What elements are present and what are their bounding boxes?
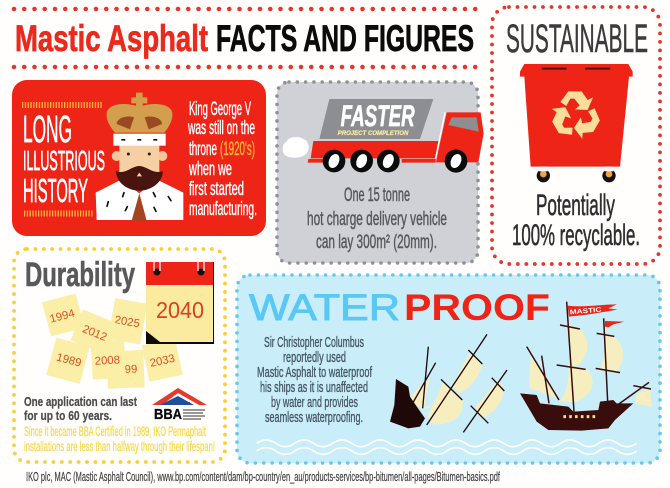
text: columbus — [257, 334, 372, 426]
year notes: 1989 — [55, 352, 83, 370]
panel: faster project completion — [277, 82, 484, 263]
text: king george v: manufacturing. — [189, 199, 257, 220]
icon: delivery truck — [283, 99, 484, 173]
year notes: 1994 — [49, 308, 76, 326]
text: columbus: his ships as it is unaffected — [260, 379, 368, 396]
text: BBA certified note: installations are less than halfway through their lifespan! — [24, 438, 215, 454]
heading: water: WATER — [249, 287, 400, 328]
text: BBA certified note: Since it became BBA Certified in 1989, IKO Permaphalt — [24, 423, 206, 439]
text: king george v: King George V — [189, 99, 251, 120]
icon: intact ship with mastic flag — [520, 302, 652, 431]
text: king george v: when we — [188, 159, 232, 180]
text: columbus: seamless waterproofing. — [265, 409, 363, 426]
heading: long illustrious history: HISTORY — [23, 172, 88, 209]
year notes: 1999 — [112, 364, 138, 376]
panel: long illustrious history: ILLUSTRIOUS — [23, 145, 105, 176]
flag label: mastic: MASTIC — [570, 307, 602, 316]
decorative hatch: bottom — [24, 210, 94, 216]
year notes: 2025 — [114, 314, 141, 330]
logo: BBA: BBA — [154, 406, 182, 423]
text: columbus: Sir Christopher Columbus — [264, 334, 364, 351]
text: columbus: by water and provides — [271, 394, 358, 411]
icon: calendar 2040 — [146, 261, 214, 344]
icon: sinking ship — [390, 334, 507, 432]
year notes: 2033 — [149, 353, 176, 370]
logo: BBA — [152, 388, 207, 423]
text: delivery vehicle fact — [307, 185, 447, 253]
icon: recycling arrows — [547, 91, 604, 142]
heading: long illustrious history: LONG — [23, 109, 72, 151]
text: potentially 100% recyclable — [512, 189, 640, 252]
year notes — [42, 293, 183, 389]
title: Mastic Asphalt: Mastic Asphalt — [15, 18, 208, 59]
text: king george v — [187, 99, 257, 220]
text: delivery vehicle fact: One 15 tonne — [344, 185, 410, 206]
header: title with dotted rules — [14, 9, 478, 67]
decorative hatch: top — [22, 102, 103, 108]
label: project completion: PROJECT COMPLETION — [338, 130, 408, 137]
text: columbus: Mastic Asphalt to waterproof — [257, 364, 372, 381]
waves — [257, 440, 637, 454]
icon: calendar 2040: 2040 — [156, 297, 204, 323]
label: faster: FASTER — [341, 100, 415, 133]
text: delivery vehicle fact: hot charge delivery vehicle — [307, 209, 447, 230]
heading: proof: PROOF — [404, 287, 550, 328]
year notes: 2008 — [94, 354, 120, 368]
panel: waterproof — [237, 275, 660, 463]
icon: recycling bin — [520, 64, 633, 182]
text: one application can last: for up to 60 years. — [24, 408, 112, 423]
panel: long illustrious history — [12, 80, 266, 236]
text: king george v: first started — [189, 179, 244, 200]
text: king george v: (1920's) — [220, 139, 255, 160]
heading: long illustrious history — [23, 109, 105, 209]
text: BBA certified note — [24, 423, 215, 454]
panel: durability — [14, 249, 225, 462]
text: delivery vehicle fact: can lay 300m² (20mm). — [316, 232, 437, 253]
heading: durability: Durability — [25, 256, 135, 294]
text: king george v: throne — [189, 139, 217, 160]
text: one application can last: One application can last — [24, 394, 138, 409]
year notes: 2012 — [81, 323, 108, 344]
panel: sustainable — [492, 7, 660, 264]
title: Facts and Figures: FACTS AND FIGURES — [216, 18, 474, 59]
icon: king with crown and beard — [96, 93, 183, 221]
text: columbus: reportedly used — [283, 349, 346, 366]
text: king george v: was still on the — [187, 118, 255, 139]
text: one application can last — [24, 394, 138, 423]
